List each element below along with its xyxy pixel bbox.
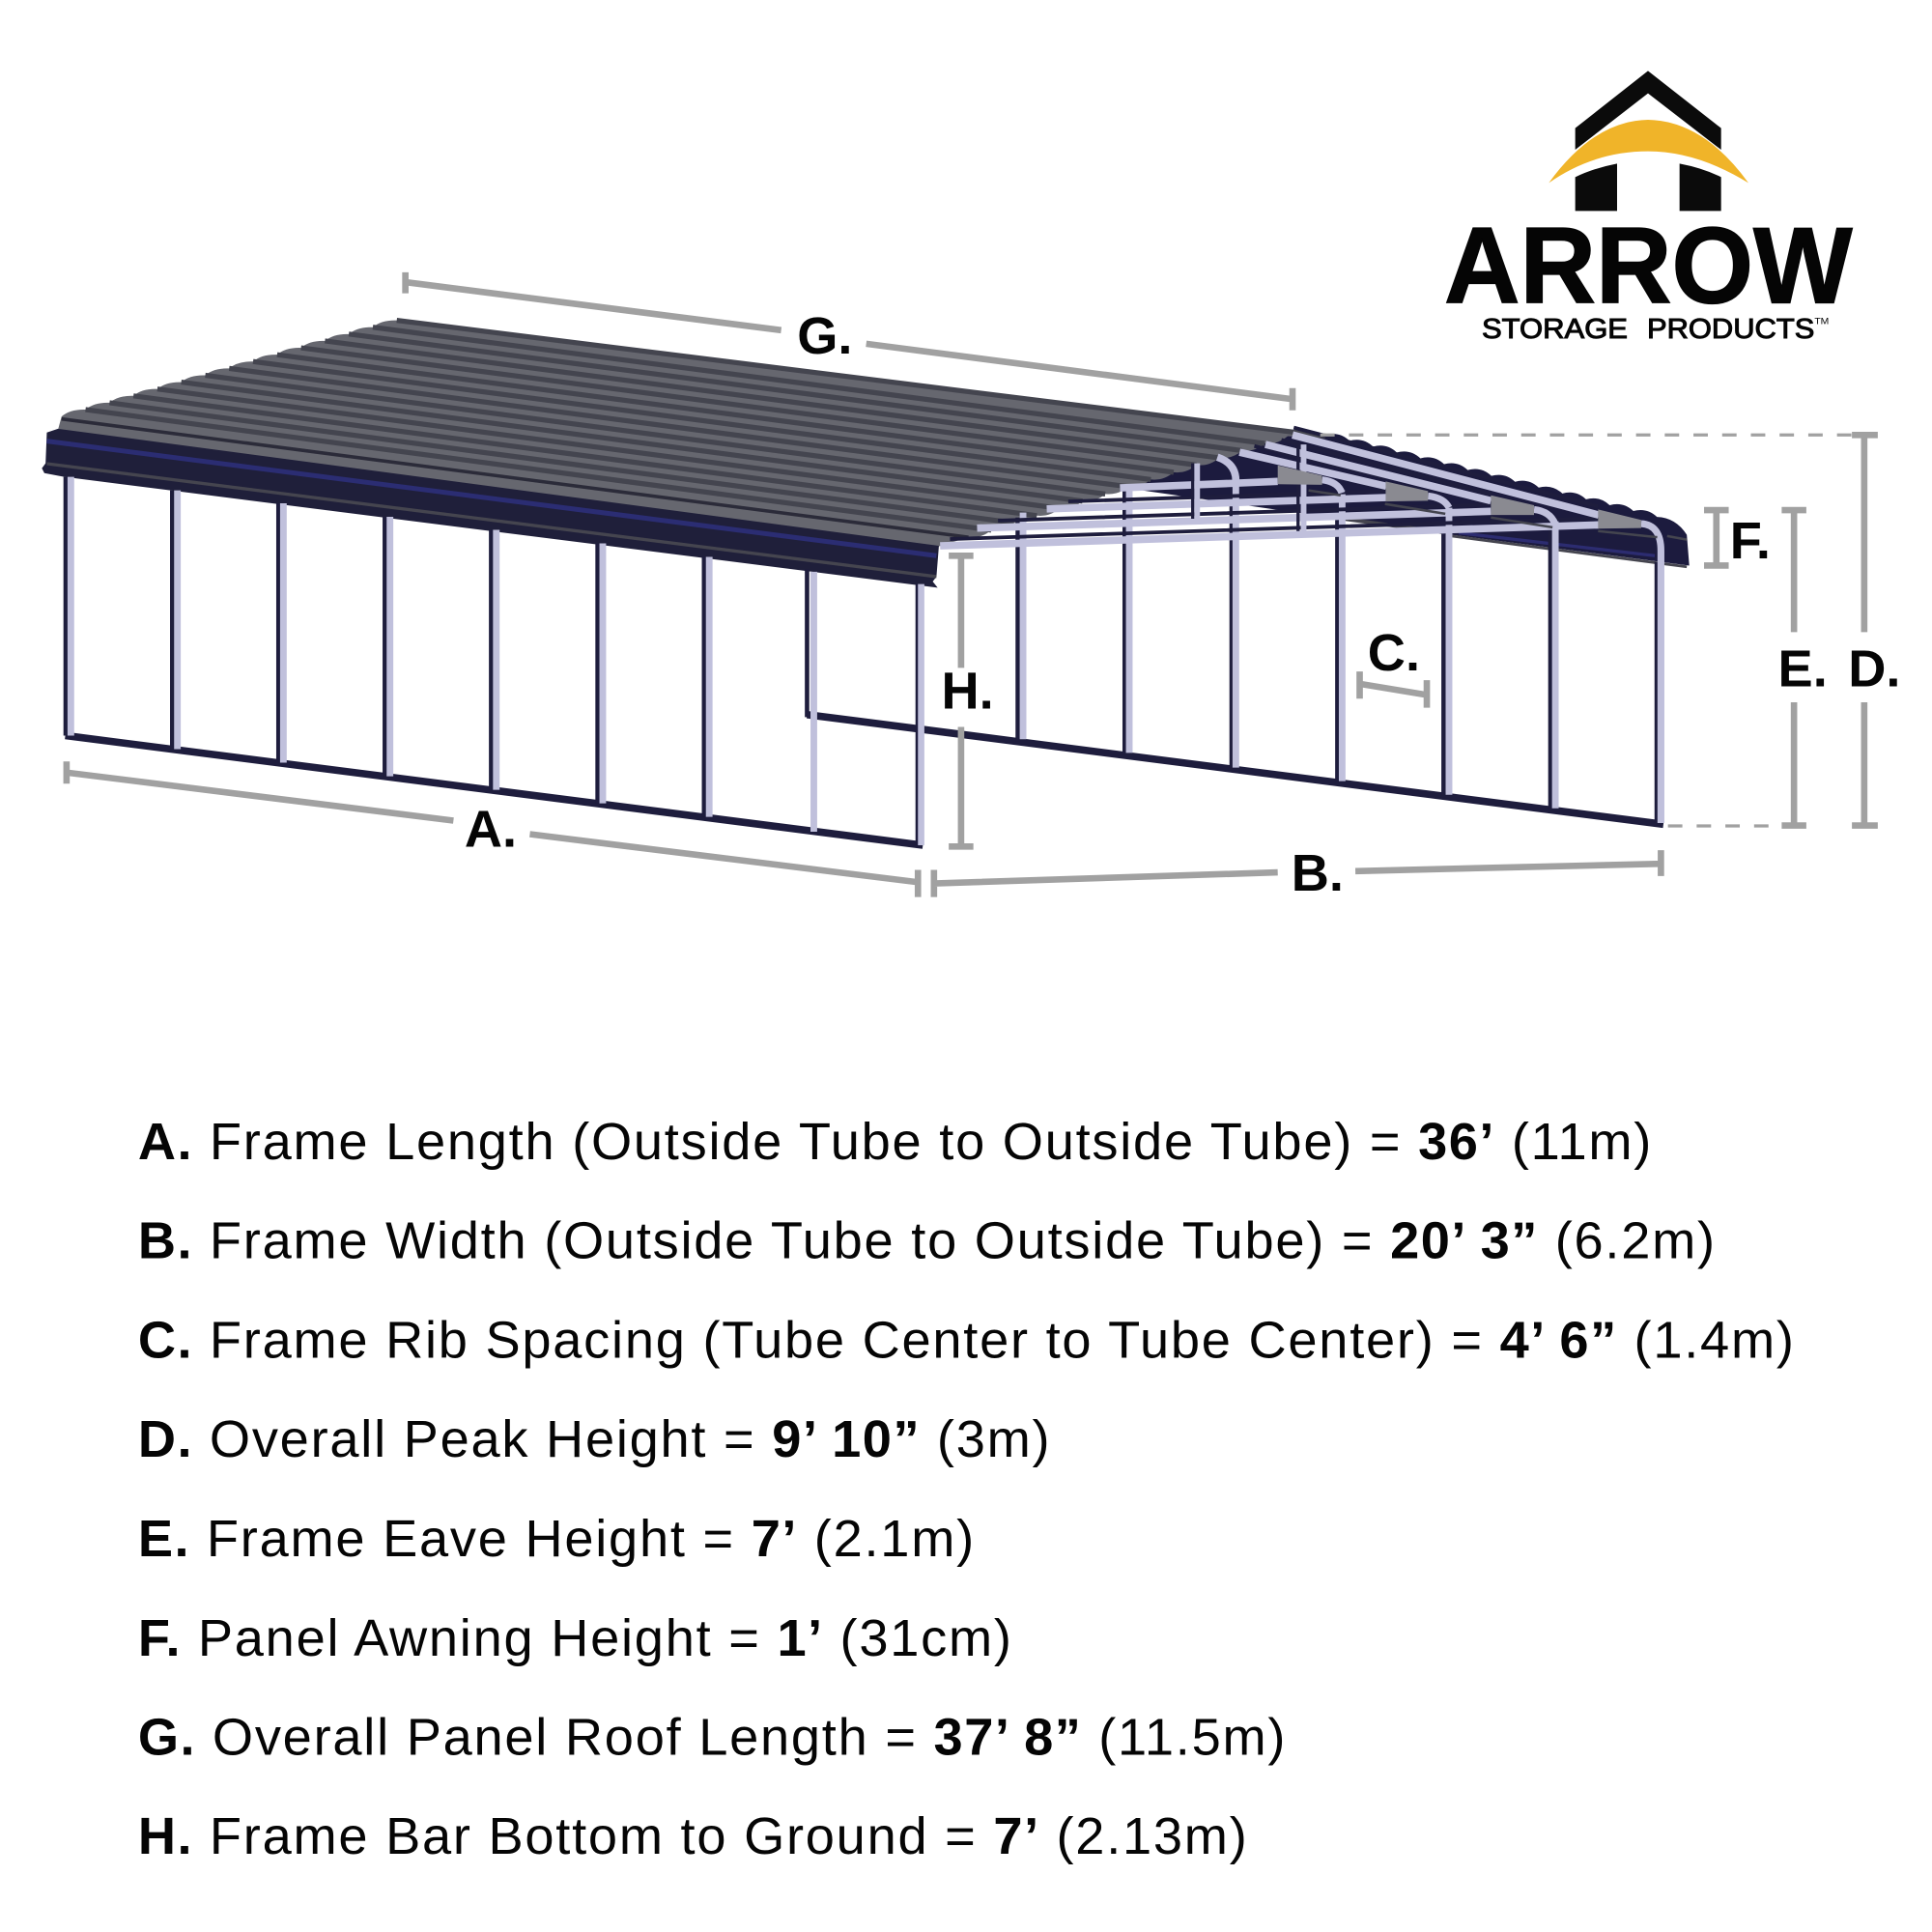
logo tagline: STORAGE [1482,314,1628,345]
side rails [66,715,1663,845]
label A: A. [465,800,517,858]
label F: F. [1730,512,1771,570]
label C: C. [1368,624,1420,682]
truss gussets [1278,466,1658,537]
spec D: D. Overall Peak Height = 9’ 10” (3m) [138,1410,1051,1468]
rear roof underside and fascia [1115,434,1690,567]
corrugated roof panel [58,321,1325,547]
spec C: C. Frame Rib Spacing (Tube Center to Tube Center) = 4’ 6” (1.4m) [138,1311,1796,1369]
spec E: E. Frame Eave Height = 7’ (2.1m) [138,1510,976,1568]
dimension F [1704,510,1729,565]
illustration: carport structure [42,321,1690,845]
specification list [138,1113,1796,1865]
dimension A [67,761,918,897]
label B: B. [1292,844,1344,902]
label E: E. [1778,639,1828,697]
logo wordmark: ARROW [1444,205,1853,326]
label H: H. [941,662,994,720]
dashed guide lines [1321,435,1852,826]
diagram letter labels [465,307,1900,902]
logo: Arrow Storage Products [1444,71,1853,345]
spec G: G. Overall Panel Roof Length = 37’ 8” (11.5m) [138,1708,1287,1766]
dimension G [406,272,1293,411]
dimension B [934,850,1661,897]
label G: G. [797,307,852,365]
left frame posts [66,477,921,845]
logo trademark: TM [1814,316,1829,326]
spec B: B. Frame Width (Outside Tube to Outside Tube) = 20’ 3” (6.2m) [138,1212,1717,1270]
dimension D [1852,435,1878,826]
right frame posts [1018,477,1657,823]
logo tagline [1482,314,1814,345]
dimension C [1360,671,1427,708]
dimension E [1781,510,1806,826]
label D: D. [1848,639,1900,697]
spec A: A. Frame Length (Outside Tube to Outside Tube) = 36’ (11m) [138,1113,1653,1171]
dimension H [949,555,974,846]
roof trusses [940,428,1661,823]
logo tagline: PRODUCTS [1647,314,1814,345]
front fascia [42,429,939,587]
spec H: H. Frame Bar Bottom to Ground = 7’ (2.13m) [138,1807,1249,1865]
spec F: F. Panel Awning Height = 1’ (31cm) [138,1609,1013,1667]
dimension lines [67,272,1878,897]
logo house mark [1548,71,1748,211]
